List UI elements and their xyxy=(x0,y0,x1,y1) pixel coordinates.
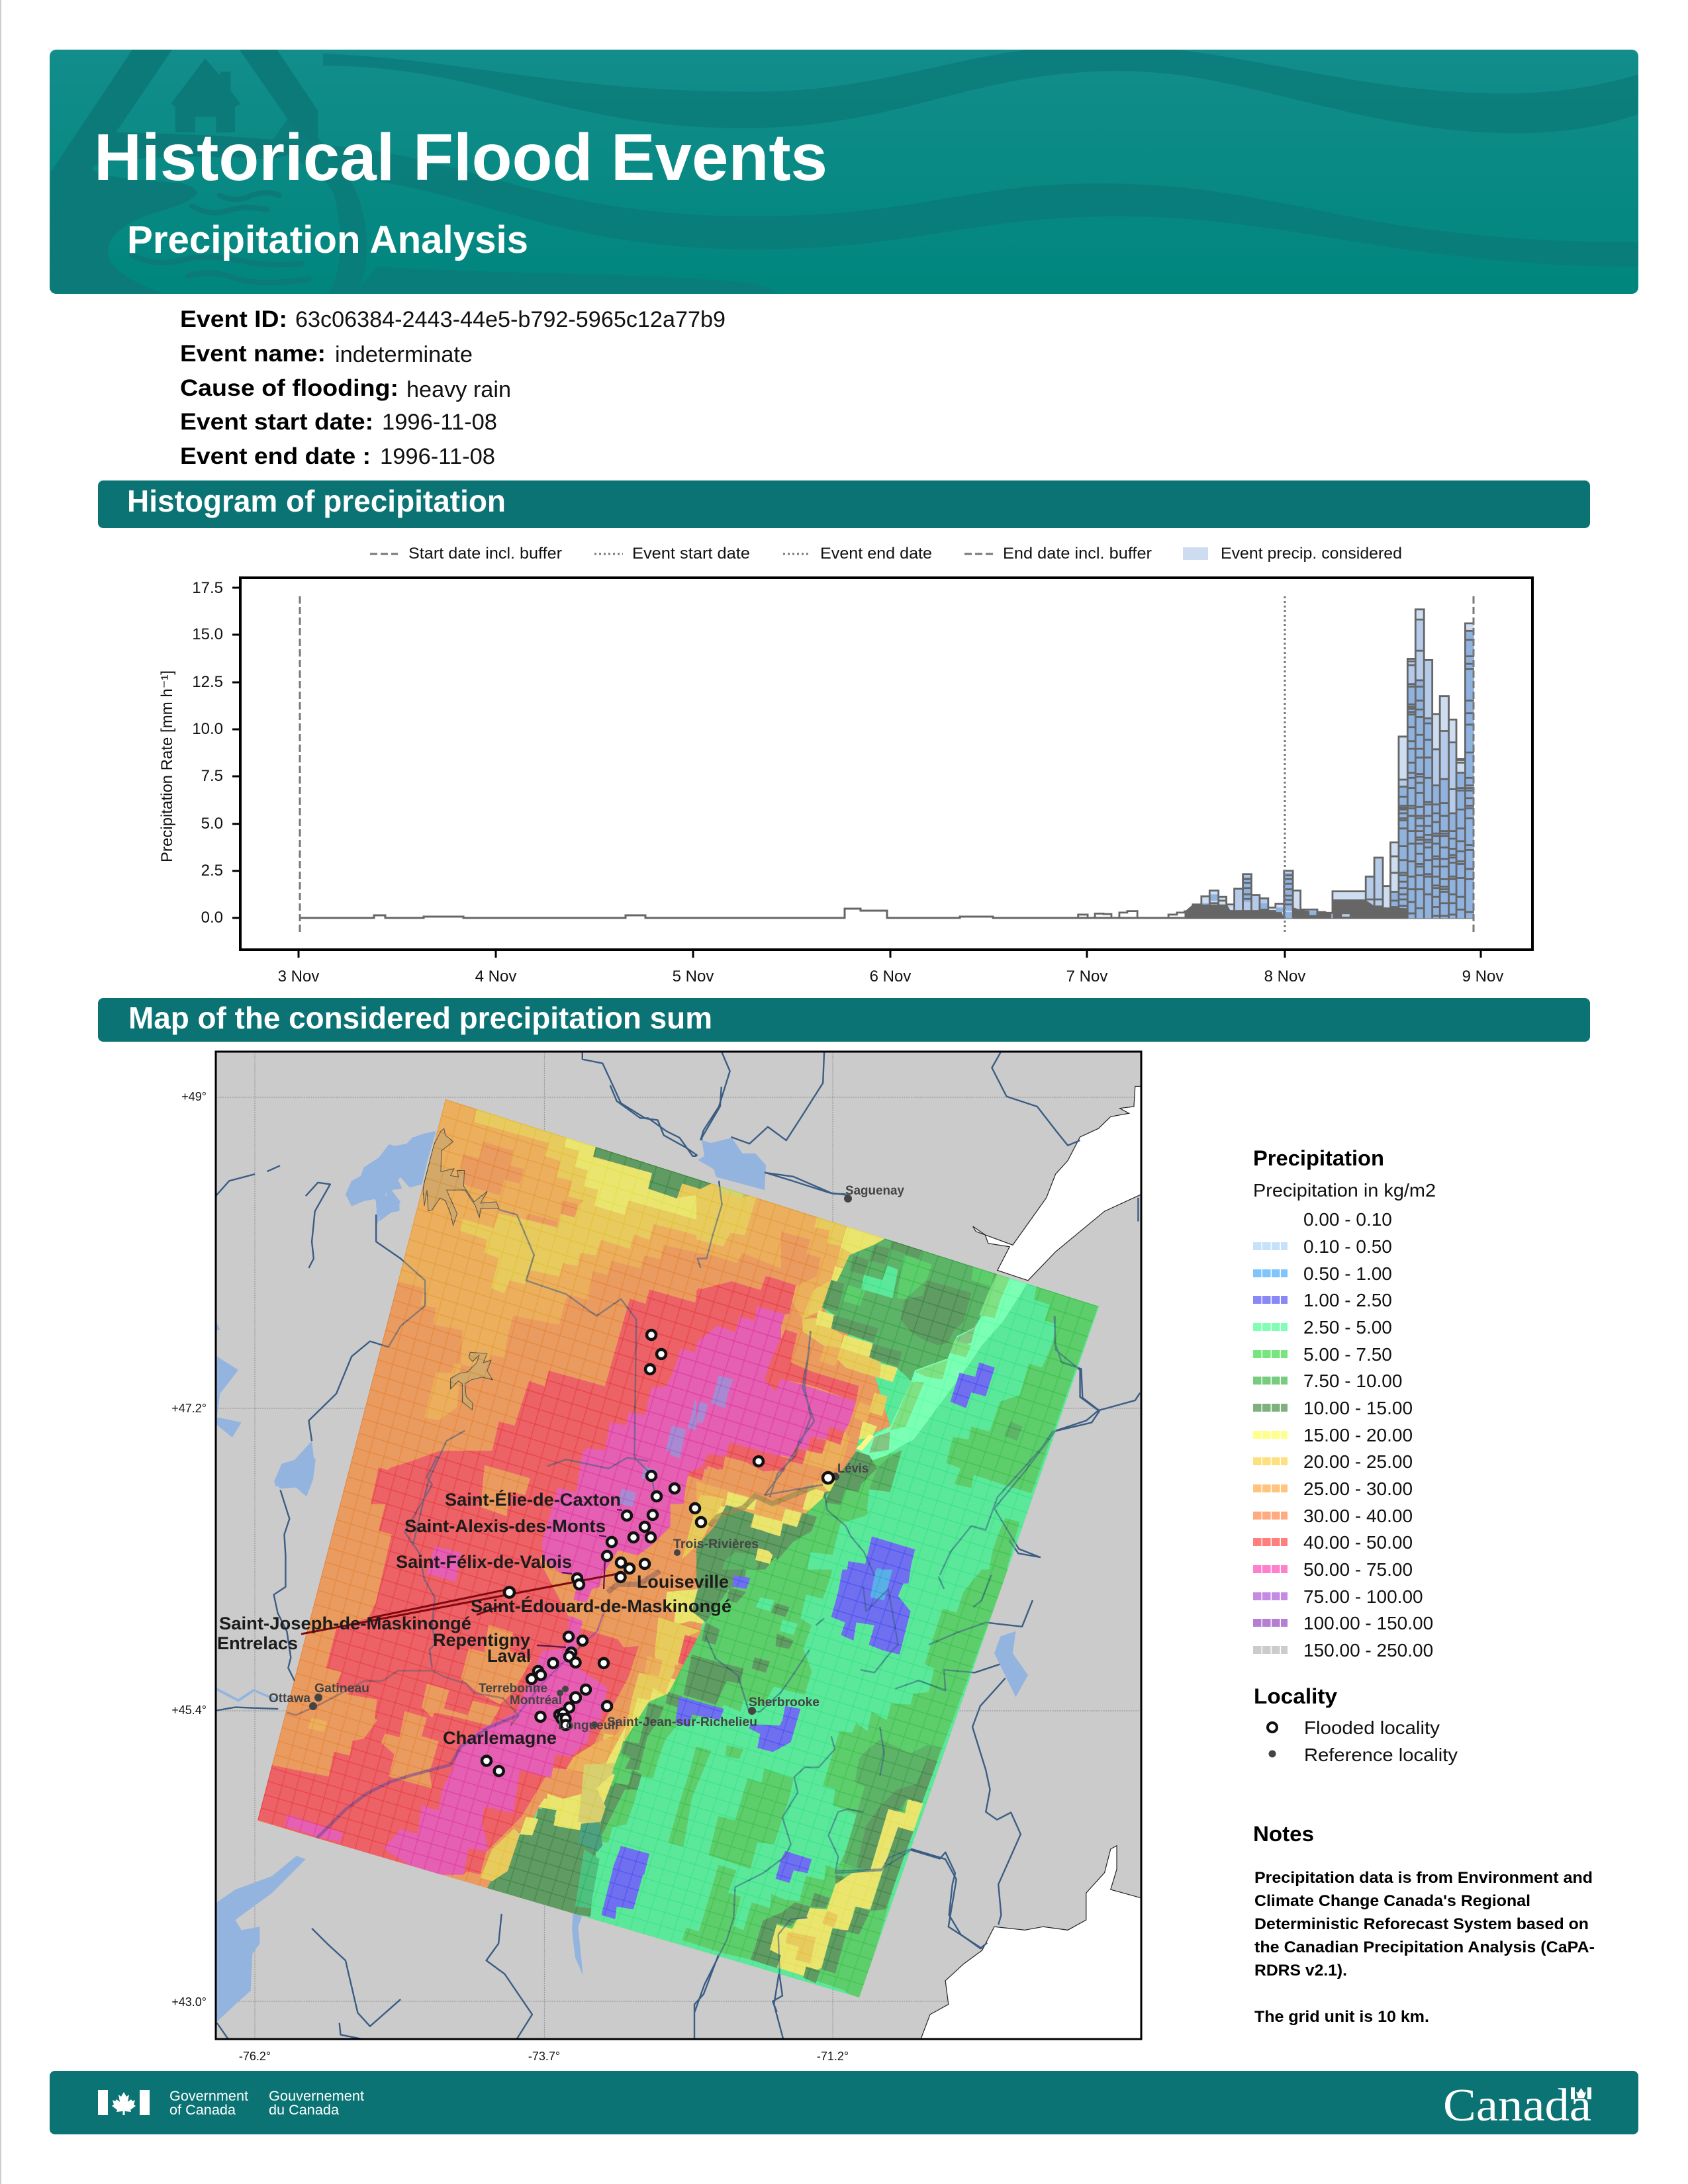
reference localities xyxy=(309,1195,852,1728)
flooded locality labels: Saint-Félix-de-Valois xyxy=(396,1552,572,1572)
legend: precipitation: 0.10 - 0.50 xyxy=(1303,1236,1392,1257)
legend: precipitation: Precipitation xyxy=(1253,1146,1384,1170)
footer bar: Government xyxy=(169,2089,248,2104)
flooded locality labels: Laval xyxy=(487,1646,531,1666)
map: base land, water xyxy=(216,1052,1141,2039)
legend: precipitation: 5.00 - 7.50 xyxy=(1303,1344,1392,1365)
small patch between tiles xyxy=(682,1495,725,1559)
notes: Climate Change Canada's Regional xyxy=(1254,1892,1530,1910)
chart frame and axes xyxy=(158,578,1532,985)
flooded locality labels: Saint-Édouard-de-Maskinongé xyxy=(471,1596,731,1616)
legend: precipitation: 30.00 - 40.00 xyxy=(1303,1506,1413,1526)
event metadata: indeterminate xyxy=(335,342,473,367)
small locality labels: Ottawa xyxy=(269,1692,310,1706)
chart legend: Event end date xyxy=(820,545,932,563)
legend: precipitation: 2.50 - 5.00 xyxy=(1303,1317,1392,1338)
map frame and coordinate labels: -76.2° xyxy=(239,2050,271,2063)
map frame and coordinate labels: +45.4° xyxy=(171,1704,207,1717)
histogram chart xyxy=(158,578,1532,985)
grid tile south-east xyxy=(590,1570,1008,2001)
precipitation grid (10 km cells, colour classes) xyxy=(252,1092,1105,2019)
header banner xyxy=(50,45,1638,294)
flooded locality labels: Entrelacs xyxy=(217,1633,298,1653)
small locality labels: Gatineau xyxy=(314,1682,369,1696)
map frame and coordinate labels xyxy=(171,1052,1141,2063)
legend: precipitation: 40.00 - 50.00 xyxy=(1303,1532,1413,1553)
wordmark: Canada: Canada xyxy=(1443,2080,1591,2131)
legend: precipitation: 25.00 - 30.00 xyxy=(1303,1479,1413,1499)
chart legend: Event precip. considered xyxy=(1221,545,1402,563)
legend: precipitation: 1.00 - 2.50 xyxy=(1303,1290,1392,1310)
chart legend: Event start date xyxy=(632,545,750,563)
chart frame and axes: 9 Nov xyxy=(1462,968,1503,985)
chart frame and axes: 12.5 xyxy=(192,673,223,691)
footer bar: du Canada xyxy=(269,2103,339,2118)
flooded locality labels: Repentigny xyxy=(433,1630,530,1650)
chart legend: End date incl. buffer xyxy=(1003,545,1152,563)
chart frame and axes: 2.5 xyxy=(201,862,223,880)
flooded locality labels: Saint-Élie-de-Caxton xyxy=(445,1489,621,1510)
small locality labels: Longueuil xyxy=(558,1719,618,1733)
small locality labels: Trois-Rivières xyxy=(673,1537,759,1551)
notes: Notes xyxy=(1253,1822,1314,1846)
notes: The grid unit is 10 km. xyxy=(1254,2008,1429,2026)
small locality labels: Sherbrooke xyxy=(749,1696,820,1709)
notes xyxy=(1253,1822,1595,2026)
chart legend: Start date incl. buffer xyxy=(408,545,562,563)
chart frame and axes: 5 Nov xyxy=(673,968,714,985)
small locality labels: Montréal xyxy=(510,1694,562,1707)
flooded locality labels: Louiseville xyxy=(637,1572,729,1592)
section bar: histogram xyxy=(98,480,1590,528)
event metadata: 1996-11-08 xyxy=(380,444,495,469)
chart frame and axes: 17.5 xyxy=(192,579,223,597)
legend: precipitation: 0.00 - 0.10 xyxy=(1303,1209,1392,1230)
date marker lines xyxy=(300,596,1474,933)
leader lines xyxy=(301,1510,622,1647)
legend: precipitation: 150.00 - 250.00 xyxy=(1303,1640,1433,1661)
event metadata: Cause of flooding: xyxy=(180,375,399,401)
footer bar: of Canada xyxy=(169,2103,236,2118)
small locality labels: Saguenay xyxy=(845,1184,904,1198)
event metadata: Event ID: xyxy=(180,306,287,332)
chart frame and axes: 0.0 xyxy=(201,909,223,927)
chart frame and axes: 10.0 xyxy=(192,720,223,738)
map frame and coordinate labels: +43.0° xyxy=(171,1995,207,2009)
event metadata: Event name: xyxy=(180,341,326,367)
grid tile north-west xyxy=(357,1096,781,1504)
event metadata: 63c06384-2443-44e5-b792-5965c12a77b9 xyxy=(295,307,726,332)
notes: Precipitation data is from Environment and xyxy=(1254,1869,1593,1887)
flooded locality labels: Saint-Joseph-de-Maskinongé xyxy=(219,1614,471,1633)
chart frame and axes: Precipitation Rate [mm h⁻¹] xyxy=(158,670,176,862)
legend: precipitation: 15.00 - 20.00 xyxy=(1303,1425,1413,1445)
icon: Canadian flag xyxy=(98,2090,150,2115)
water over grid xyxy=(423,1128,763,1410)
flooded locality labels xyxy=(217,1489,731,1748)
event metadata: Event end date : xyxy=(180,443,371,469)
title: Historical Flood Events xyxy=(94,120,827,195)
event metadata: heavy rain xyxy=(406,377,511,402)
legend: precipitation: 20.00 - 25.00 xyxy=(1303,1451,1413,1472)
legend: locality xyxy=(1254,1684,1458,1765)
section bar: histogram: Histogram of precipitation xyxy=(127,484,506,518)
small locality labels: Lévis xyxy=(837,1462,868,1476)
subtitle: Precipitation Analysis xyxy=(127,218,528,261)
low flat precipitation trace xyxy=(300,909,1474,918)
histogram bars xyxy=(1078,610,1474,919)
notes: Deterministic Reforecast System based on xyxy=(1254,1915,1589,1933)
legend: precipitation: 7.50 - 10.00 xyxy=(1303,1371,1402,1391)
legend: locality: Flooded locality xyxy=(1304,1717,1440,1738)
chart frame and axes: 8 Nov xyxy=(1264,968,1305,985)
map frame and coordinate labels: +47.2° xyxy=(171,1402,207,1415)
flooded localities xyxy=(482,1330,833,1776)
chart frame and axes: 7.5 xyxy=(201,767,223,785)
legend: precipitation: 10.00 - 15.00 xyxy=(1303,1398,1413,1418)
map frame and coordinate labels: +49° xyxy=(181,1090,207,1103)
legend: precipitation: 0.50 - 1.00 xyxy=(1303,1263,1392,1284)
grid tile north-east xyxy=(696,1181,1098,1584)
section bar: map xyxy=(98,998,1590,1042)
flooded locality labels: Charlemagne xyxy=(443,1728,557,1748)
grid tile south, lake Champlain xyxy=(465,1763,627,1917)
section bar: map: Map of the considered precipitation sum xyxy=(128,1001,712,1035)
footer bar xyxy=(50,2071,1638,2134)
rivers seen through the grid xyxy=(294,1186,1078,1974)
grid tile south-west xyxy=(257,1451,671,1875)
chart frame and axes: 4 Nov xyxy=(475,968,516,985)
small locality labels: Terrebonne xyxy=(479,1682,547,1696)
chart legend xyxy=(370,545,1402,563)
chart frame and axes: 15.0 xyxy=(192,625,223,643)
legend: locality: Reference locality xyxy=(1304,1745,1458,1765)
small locality labels xyxy=(269,1184,904,1733)
legend: precipitation: 50.00 - 75.00 xyxy=(1303,1559,1413,1580)
chart frame and axes: 3 Nov xyxy=(278,968,319,985)
rivers xyxy=(216,1052,1140,2039)
chart frame and axes: 5.0 xyxy=(201,815,223,833)
footer bar: Gouvernement xyxy=(269,2089,364,2104)
event metadata: Event start date: xyxy=(180,409,373,435)
notes: the Canadian Precipitation Analysis (CaPA- xyxy=(1254,1938,1595,1956)
event metadata xyxy=(180,306,726,469)
legend: precipitation xyxy=(1253,1146,1436,1661)
legend: precipitation: 75.00 - 100.00 xyxy=(1303,1586,1423,1607)
chart frame and axes: 6 Nov xyxy=(870,968,911,985)
legend: precipitation: 100.00 - 150.00 xyxy=(1303,1613,1433,1633)
notes: RDRS v2.1). xyxy=(1254,1962,1347,1979)
map frame and coordinate labels: -73.7° xyxy=(528,2050,560,2063)
chart frame and axes: 7 Nov xyxy=(1066,968,1107,985)
precipitation grid lines xyxy=(258,1099,1099,1993)
legend: precipitation: Precipitation in kg/m2 xyxy=(1253,1180,1436,1201)
legend: locality: Locality xyxy=(1254,1684,1337,1708)
map frame and coordinate labels: -71.2° xyxy=(817,2050,849,2063)
event metadata: 1996-11-08 xyxy=(382,410,497,435)
small locality labels: Saint-Jean-sur-Richelieu xyxy=(607,1715,757,1729)
flooded locality labels: Saint-Alexis-des-Monts xyxy=(404,1516,606,1536)
